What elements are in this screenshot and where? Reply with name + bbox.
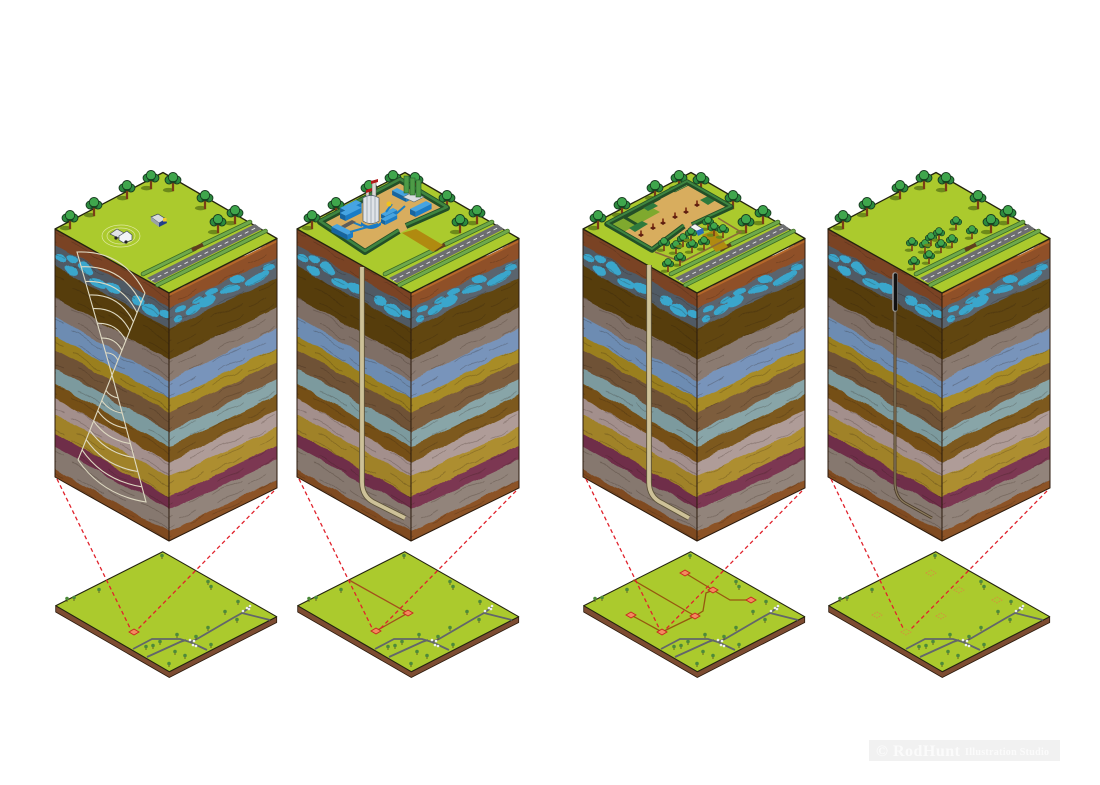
road and hedges bbox=[143, 222, 266, 285]
ground surface bbox=[828, 172, 1050, 293]
small young trees bbox=[657, 217, 729, 273]
drilling rig tower bbox=[361, 179, 381, 229]
road and hedges bbox=[385, 222, 508, 285]
ground surface bbox=[55, 172, 277, 293]
watermark: Illustration Studio bbox=[965, 747, 1049, 758]
replanted small trees bbox=[905, 217, 978, 271]
panel: drilling rig block bbox=[282, 170, 532, 678]
map plate bbox=[298, 552, 519, 678]
red dashed projection lines bbox=[57, 479, 274, 630]
map plate bbox=[829, 552, 1050, 678]
panel: decommissioned and restored block bbox=[813, 170, 1063, 678]
watermark: © RodHunt bbox=[876, 743, 961, 760]
sealed well bore bbox=[895, 275, 932, 518]
watermark bbox=[869, 740, 1060, 761]
wellheads bbox=[638, 200, 700, 237]
brown paddock fence bbox=[655, 218, 741, 262]
well site markers bbox=[626, 570, 756, 635]
trees bbox=[60, 170, 243, 234]
faint former well sites bbox=[872, 570, 1002, 635]
strata cross-section bbox=[568, 220, 818, 560]
strata cross-section bbox=[40, 220, 290, 560]
seismic fan lower wedge bbox=[78, 375, 146, 502]
map plate bbox=[56, 552, 277, 678]
well bore bbox=[649, 265, 689, 518]
drill pad with fence bbox=[320, 179, 447, 252]
pipeline network bbox=[631, 573, 751, 632]
well site markers bbox=[371, 610, 413, 634]
production pad with fence bbox=[607, 181, 731, 250]
map plate bbox=[584, 552, 805, 678]
service truck bbox=[690, 224, 704, 236]
red dashed projection lines bbox=[831, 479, 1047, 630]
road and hedges bbox=[671, 222, 794, 285]
seismic fan upper wedge bbox=[77, 252, 145, 375]
ground surface bbox=[297, 172, 519, 293]
strata cross-section bbox=[282, 220, 532, 560]
green storage tanks bbox=[404, 176, 421, 197]
ground surface bbox=[583, 172, 805, 293]
access track bbox=[702, 230, 728, 252]
blue equipment cabins bbox=[331, 188, 432, 240]
panel: production well pad block bbox=[568, 170, 818, 678]
mud pit and cabins bbox=[341, 192, 424, 228]
trees bbox=[588, 170, 771, 234]
survey truck bbox=[151, 214, 167, 227]
strata cross-section bbox=[813, 220, 1063, 560]
well site marker bbox=[129, 629, 139, 635]
trees bbox=[833, 170, 1016, 234]
well bore bbox=[362, 267, 405, 518]
road and hedges bbox=[916, 222, 1038, 285]
seismic vibration rings bbox=[102, 225, 140, 247]
red dashed projection lines bbox=[586, 479, 802, 630]
access track bbox=[402, 229, 443, 252]
trees bbox=[302, 170, 485, 234]
pipeline routes bbox=[349, 580, 408, 631]
panel: seismic survey block bbox=[40, 170, 290, 678]
red dashed projection lines bbox=[299, 479, 516, 630]
seismic thumper truck bbox=[110, 229, 132, 244]
